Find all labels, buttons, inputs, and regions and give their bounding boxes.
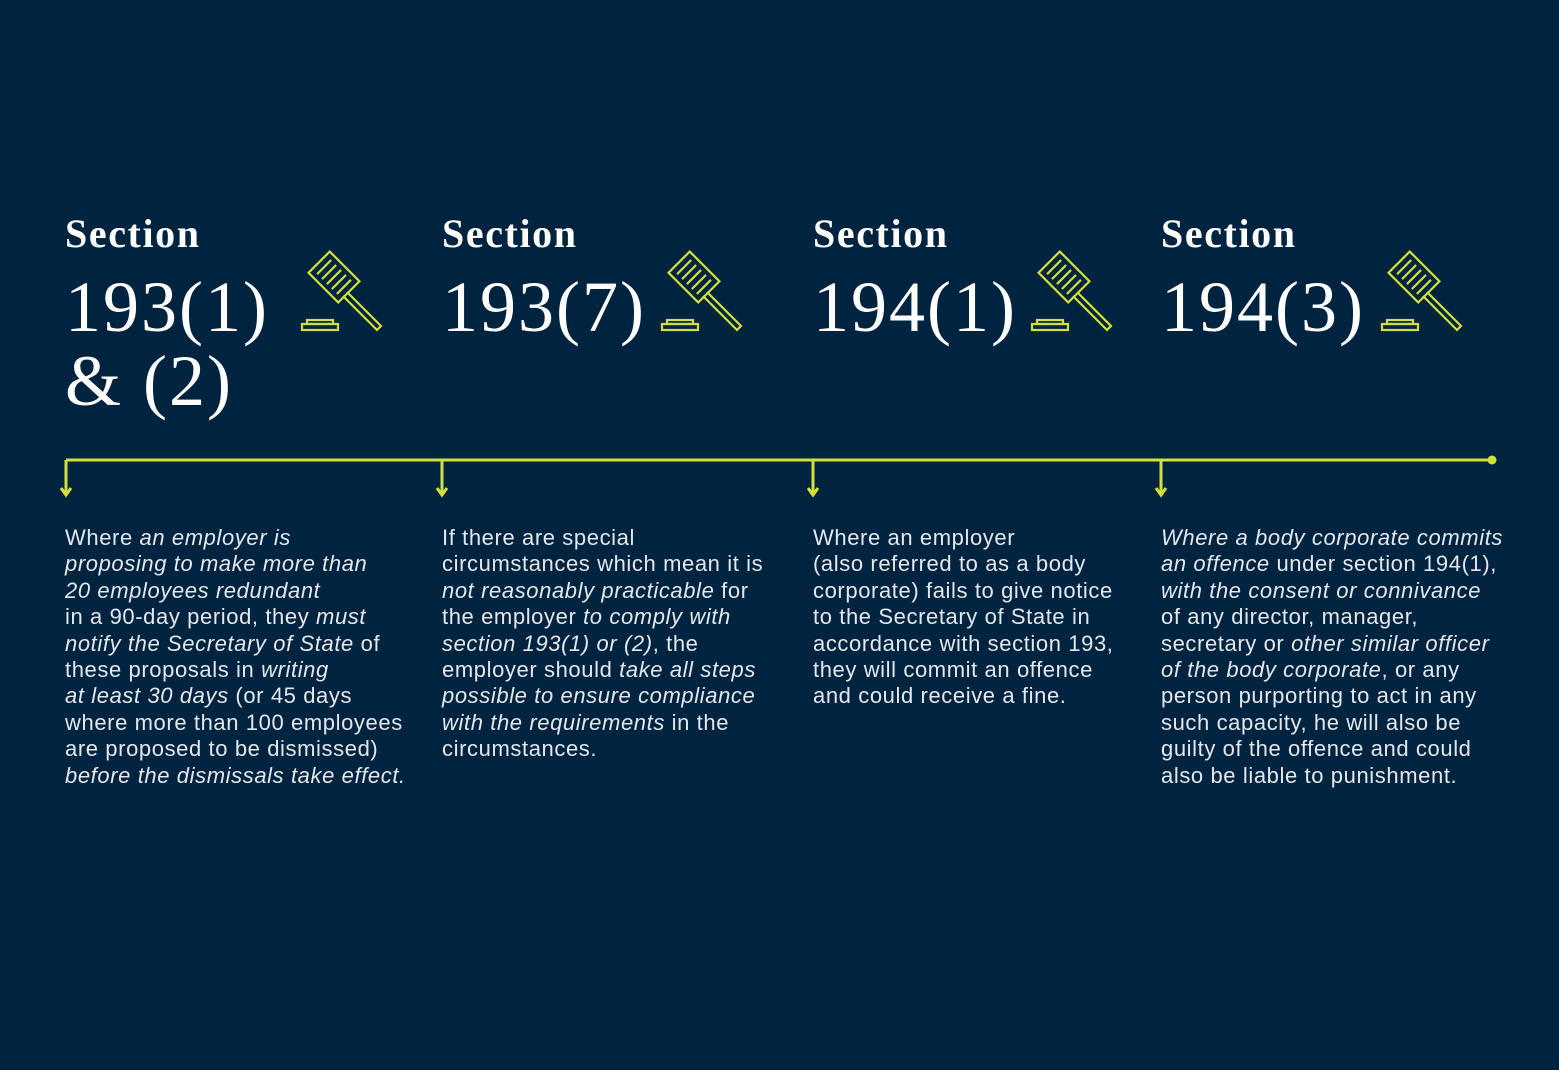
text: column 3: corporate) fails to give notice [813, 578, 1113, 603]
icon: gavel 4 [1380, 250, 1462, 332]
text: column 4: an offence under section 194(1), [1161, 551, 1497, 576]
text: column 2: the employer to comply with [442, 604, 731, 629]
text: column 2: with the requirements in the [442, 710, 729, 735]
text: column 3 [813, 525, 1114, 708]
text: column 3: Where an employer [813, 525, 1015, 550]
text: column 1: 20 employees redundant [65, 578, 320, 603]
text: column 4: secretary or other similar officer [1161, 631, 1490, 656]
text: column 3: and could receive a fine. [813, 683, 1066, 708]
text: column 4: Where a body corporate commits [1161, 525, 1503, 550]
column 3 heading: 194(1) [813, 267, 1017, 347]
column 4 heading [1161, 211, 1365, 347]
text: column 4: of the body corporate, or any [1161, 657, 1460, 682]
icon: gavel 1 [300, 250, 382, 332]
text: column 1 [64, 525, 406, 788]
text: column 2: circumstances which mean it is [442, 551, 763, 576]
text: column 1: are proposed to be dismissed) [65, 736, 378, 761]
column 1 heading: Section [65, 211, 201, 256]
column 3 heading: Section [813, 211, 949, 256]
text: column 2 [442, 525, 763, 761]
text: column 3: to the Secretary of State in [813, 604, 1090, 629]
text: column 1: notify the Secretary of State of [65, 631, 380, 656]
text: column 2: employer should take all steps [442, 657, 756, 682]
text: column 1: Where an employer is [65, 525, 291, 550]
text: column 3: accordance with section 193, [813, 631, 1114, 656]
column 4 heading: 194(3) [1161, 267, 1365, 347]
column 4 heading: Section [1161, 211, 1297, 256]
text: column 1: proposing to make more than [65, 551, 367, 576]
text: column 1: where more than 100 employees [65, 710, 403, 735]
text: column 1: these proposals in writing [65, 657, 329, 682]
text: column 4: such capacity, he will also be [1161, 710, 1461, 735]
column 1 heading [65, 211, 269, 421]
icon: gavel 2 [660, 250, 742, 332]
text: column 1: at least 30 days (or 45 days [65, 683, 352, 708]
timeline with arrows [60, 456, 1496, 498]
text: column 4: of any director, manager, [1161, 604, 1418, 629]
column 2 heading [442, 211, 646, 347]
text: column 4: with the consent or connivance [1161, 578, 1481, 603]
text: column 1: before the dismissals take effect. [65, 763, 406, 788]
column 2 heading: 193(7) [442, 267, 646, 347]
text: column 2: If there are special [442, 525, 635, 550]
text: column 2: section 193(1) or (2), the [442, 631, 698, 656]
column 3 heading [813, 211, 1017, 347]
text: column 4: person purporting to act in any [1161, 683, 1477, 708]
icon: gavel 3 [1030, 250, 1112, 332]
text: column 2: not reasonably practicable for [442, 578, 749, 603]
text: column 2: possible to ensure compliance [442, 683, 755, 708]
text: column 4: guilty of the offence and could [1161, 736, 1472, 761]
text: column 3: (also referred to as a body [813, 551, 1086, 576]
column 1 heading: 193(1) [65, 267, 269, 347]
column 1 heading: & (2) [65, 341, 233, 421]
text: column 3: they will commit an offence [813, 657, 1093, 682]
text: column 4 [1161, 525, 1503, 788]
column 2 heading: Section [442, 211, 578, 256]
text: column 4: also be liable to punishment. [1161, 763, 1457, 788]
text: column 1: in a 90-day period, they must [65, 604, 366, 629]
text: column 2: circumstances. [442, 736, 597, 761]
